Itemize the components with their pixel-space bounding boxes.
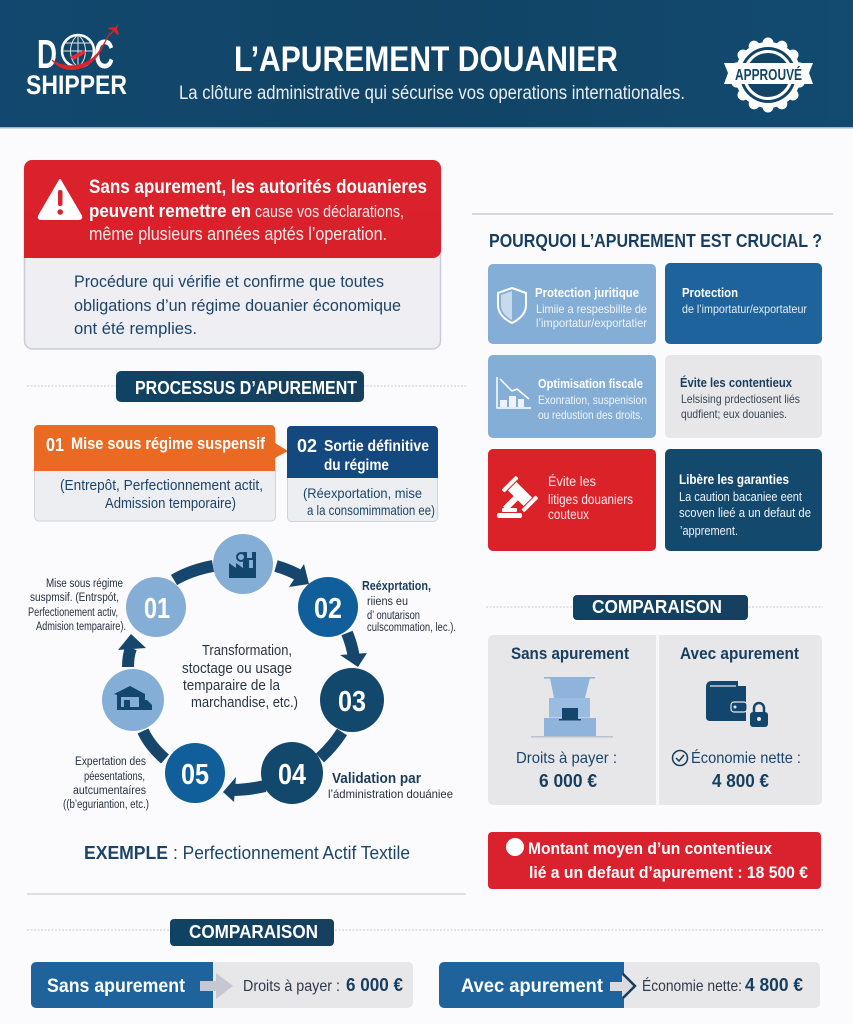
alert text: cause vos déclarations, [255, 202, 404, 221]
column: avec apurement: Avec apurement [680, 644, 799, 663]
center label: stoctage ou usage [182, 660, 292, 677]
label 04: l’ádministration douániee [328, 787, 453, 801]
card: optimisation fiscale: Exonration, suspenision [538, 393, 647, 407]
badge: approuvé: APPROUVÉ [735, 65, 802, 84]
icon: gavel [494, 476, 538, 520]
icon: check circle [672, 750, 688, 766]
heading: pourquoi: POURQUOI L’APUREMENT EST CRUCIAL ? [489, 231, 822, 251]
label 02: culscommation, lec.). [367, 622, 456, 634]
bar: sans apurement [31, 962, 413, 1008]
card: évite les contentieux: Évite les contentieux [680, 375, 793, 390]
bar: sans apurement: Droits à payer : [243, 978, 340, 995]
heading: processus d'apurement [116, 371, 364, 402]
arrow [200, 973, 233, 999]
node 02 [298, 577, 358, 637]
center label [182, 642, 298, 711]
label 05: péesentations, [84, 771, 145, 783]
column: avec apurement: Économie nette : [691, 748, 801, 767]
example line: : Perfectionnement Actif Textile [173, 843, 410, 863]
step 02 card [287, 426, 438, 522]
bar: avec apurement [439, 962, 820, 1008]
card: évite les litiges: litiges douaniers [548, 491, 633, 507]
label 01: suspmsif. (Entrspót, [30, 592, 119, 604]
alert text: peuvent remettre en [89, 201, 251, 221]
arrows of the cycle [128, 566, 354, 790]
arrowheads [118, 564, 367, 802]
panel: alert [24, 160, 441, 349]
label 05 [63, 756, 149, 811]
heading: comparaison [573, 595, 748, 620]
node 04 [261, 742, 323, 804]
node 05 [165, 743, 225, 803]
bar: sans apurement: Sans apurement [47, 976, 186, 997]
bar: avec apurement: Économie nette: [642, 976, 742, 995]
arrow [610, 975, 635, 997]
center label: marchandise, etc.) [191, 694, 298, 711]
logo: DOC SHIPPER: D [37, 31, 57, 77]
label 02: Reéxprtation, [362, 578, 431, 593]
card: libère les garanties: scoven lieé a un defaut de [679, 505, 811, 520]
column: avec apurement: 4 800 € [712, 771, 769, 791]
node 03: 03 [338, 686, 366, 718]
card: protection: de l’importatur/exportateur [682, 302, 807, 316]
step 02 card: a la consomimmation ee) [307, 502, 435, 518]
badge: approuvé [724, 38, 813, 112]
header banner [0, 0, 853, 128]
center label: temparaire de la [183, 677, 281, 694]
node: warehouse and truck [102, 669, 164, 731]
step 02 card: 02 [297, 436, 317, 456]
definition text: Procédure qui vérifie et confirme que toutes [74, 272, 384, 291]
definition text: obligations d’un régime douanier économique [74, 296, 401, 315]
label 05: Expertation des [75, 756, 146, 768]
card: évite les contentieux [665, 355, 822, 438]
node 01: 01 [144, 593, 170, 625]
step 01 card: Mise sous régime suspensif [71, 434, 265, 453]
card: libère les garanties [665, 449, 822, 551]
step 01 card: Admission temporaire) [105, 495, 236, 512]
step 01 card [34, 425, 288, 521]
callout: montant moyen [488, 832, 821, 889]
bar: avec apurement: 4 800 € [745, 975, 803, 995]
node 03 [320, 668, 384, 732]
label 01: Admision temparaire). [36, 621, 126, 633]
label 01: Mise sous régime [46, 578, 123, 590]
card: protection [665, 263, 822, 344]
label 05: autcumentaíres [73, 785, 146, 797]
heading: comparaison (bottom) [170, 919, 334, 946]
label 02 [362, 578, 456, 634]
column: sans apurement: Sans apurement [511, 644, 629, 663]
card: optimisation fiscale [488, 355, 656, 438]
column: sans apurement: 6 000 € [539, 771, 597, 791]
alert text: Sans apurement, les autorités douanieres [89, 177, 427, 198]
column: sans apurement: Droits à payer : [516, 750, 617, 767]
node 02: 02 [314, 593, 342, 625]
node: factory [213, 534, 273, 594]
callout: montant moyen: lié a un defaut d’apurement : 18 500 € [529, 863, 808, 882]
label 04 [328, 770, 453, 801]
callout: montant moyen: Montant moyen d’un contentieux [528, 839, 772, 858]
node 04: 04 [278, 759, 306, 791]
icon: falling chart [497, 377, 531, 408]
card: libère les garanties: Libère les garanties [679, 471, 789, 487]
step 01 card: (Entrepôt, Perfectionnement actit, [60, 477, 263, 494]
column: avec apurement [672, 644, 801, 791]
card: protection juridique: Limiie a respesbilite de [536, 302, 647, 316]
card: libère les garanties: La caution bacaniee eent [679, 489, 802, 504]
step 02 card: du régime [324, 457, 389, 474]
icon: stacked goods [531, 677, 613, 738]
title: L’APUREMENT DOUANIER [234, 40, 618, 79]
icon: shield [498, 288, 526, 323]
definition text [74, 272, 401, 338]
card: évite les litiges: couteux [548, 506, 589, 522]
icon: wallet and lock [706, 681, 768, 727]
card: optimisation fiscale: ou redustion des droits. [538, 408, 643, 422]
heading: comparaison (bottom): COMPARAISON [189, 922, 318, 942]
column: sans apurement [511, 644, 629, 791]
card: protection juridique: Protection juritique [535, 285, 639, 300]
heading: comparaison: COMPARAISON [592, 597, 722, 617]
logo: DOC SHIPPER: SHIPPER [26, 70, 127, 100]
center label: Transformation, [202, 642, 292, 659]
card: protection juridique: l’importatur/exportatier [536, 316, 647, 330]
label 01 [28, 578, 126, 633]
definition text: ont été remplies. [74, 319, 197, 338]
step 01 card: 01 [46, 435, 64, 455]
alert text: même plusieurs années aptés l’operation. [89, 224, 387, 244]
label 02: riiens eu [367, 596, 408, 608]
label 02: d’ onutarison [367, 610, 420, 622]
card: évite les litiges [488, 449, 656, 551]
card: protection juridique [488, 264, 656, 344]
example line: EXEMPLE [84, 843, 168, 863]
node 01 [126, 577, 186, 637]
label 01: Perfectionement activ, [28, 607, 118, 619]
card: évite les litiges: Évite les [548, 473, 596, 489]
card: libère les garanties: ’apprement. [680, 523, 738, 538]
logo: DOC SHIPPER [26, 24, 127, 100]
card: optimisation fiscale: Optimisation fiscale [538, 376, 643, 391]
bar: avec apurement: Avec apurement [461, 976, 604, 997]
logo: DOC SHIPPER: C [94, 31, 114, 77]
label 05: ((b’eguriantion, etc.) [63, 799, 149, 811]
subtitle: La clôture administrative qui sécurise vos operations internationales. [179, 83, 685, 104]
panel: comparison [488, 635, 822, 805]
alert text [89, 177, 427, 244]
label 04: Validation par [332, 770, 421, 787]
node 05: 05 [181, 759, 209, 791]
card: protection: Protection [682, 285, 738, 300]
card: évite les contentieux: Lelsising prdectiosent liés [681, 392, 800, 406]
heading: processus d'apurement: PROCESSUS D’APUREMENT [135, 378, 357, 398]
icon: warning triangle [39, 180, 81, 219]
step 02 card: (Réexportation, mise [303, 485, 422, 501]
step 02 card: Sortie définitive [324, 438, 429, 455]
cycle diagram [28, 534, 456, 811]
card: évite les contentieux: qudfient; eux douanies. [681, 407, 787, 421]
bar: sans apurement: 6 000 € [346, 975, 403, 995]
